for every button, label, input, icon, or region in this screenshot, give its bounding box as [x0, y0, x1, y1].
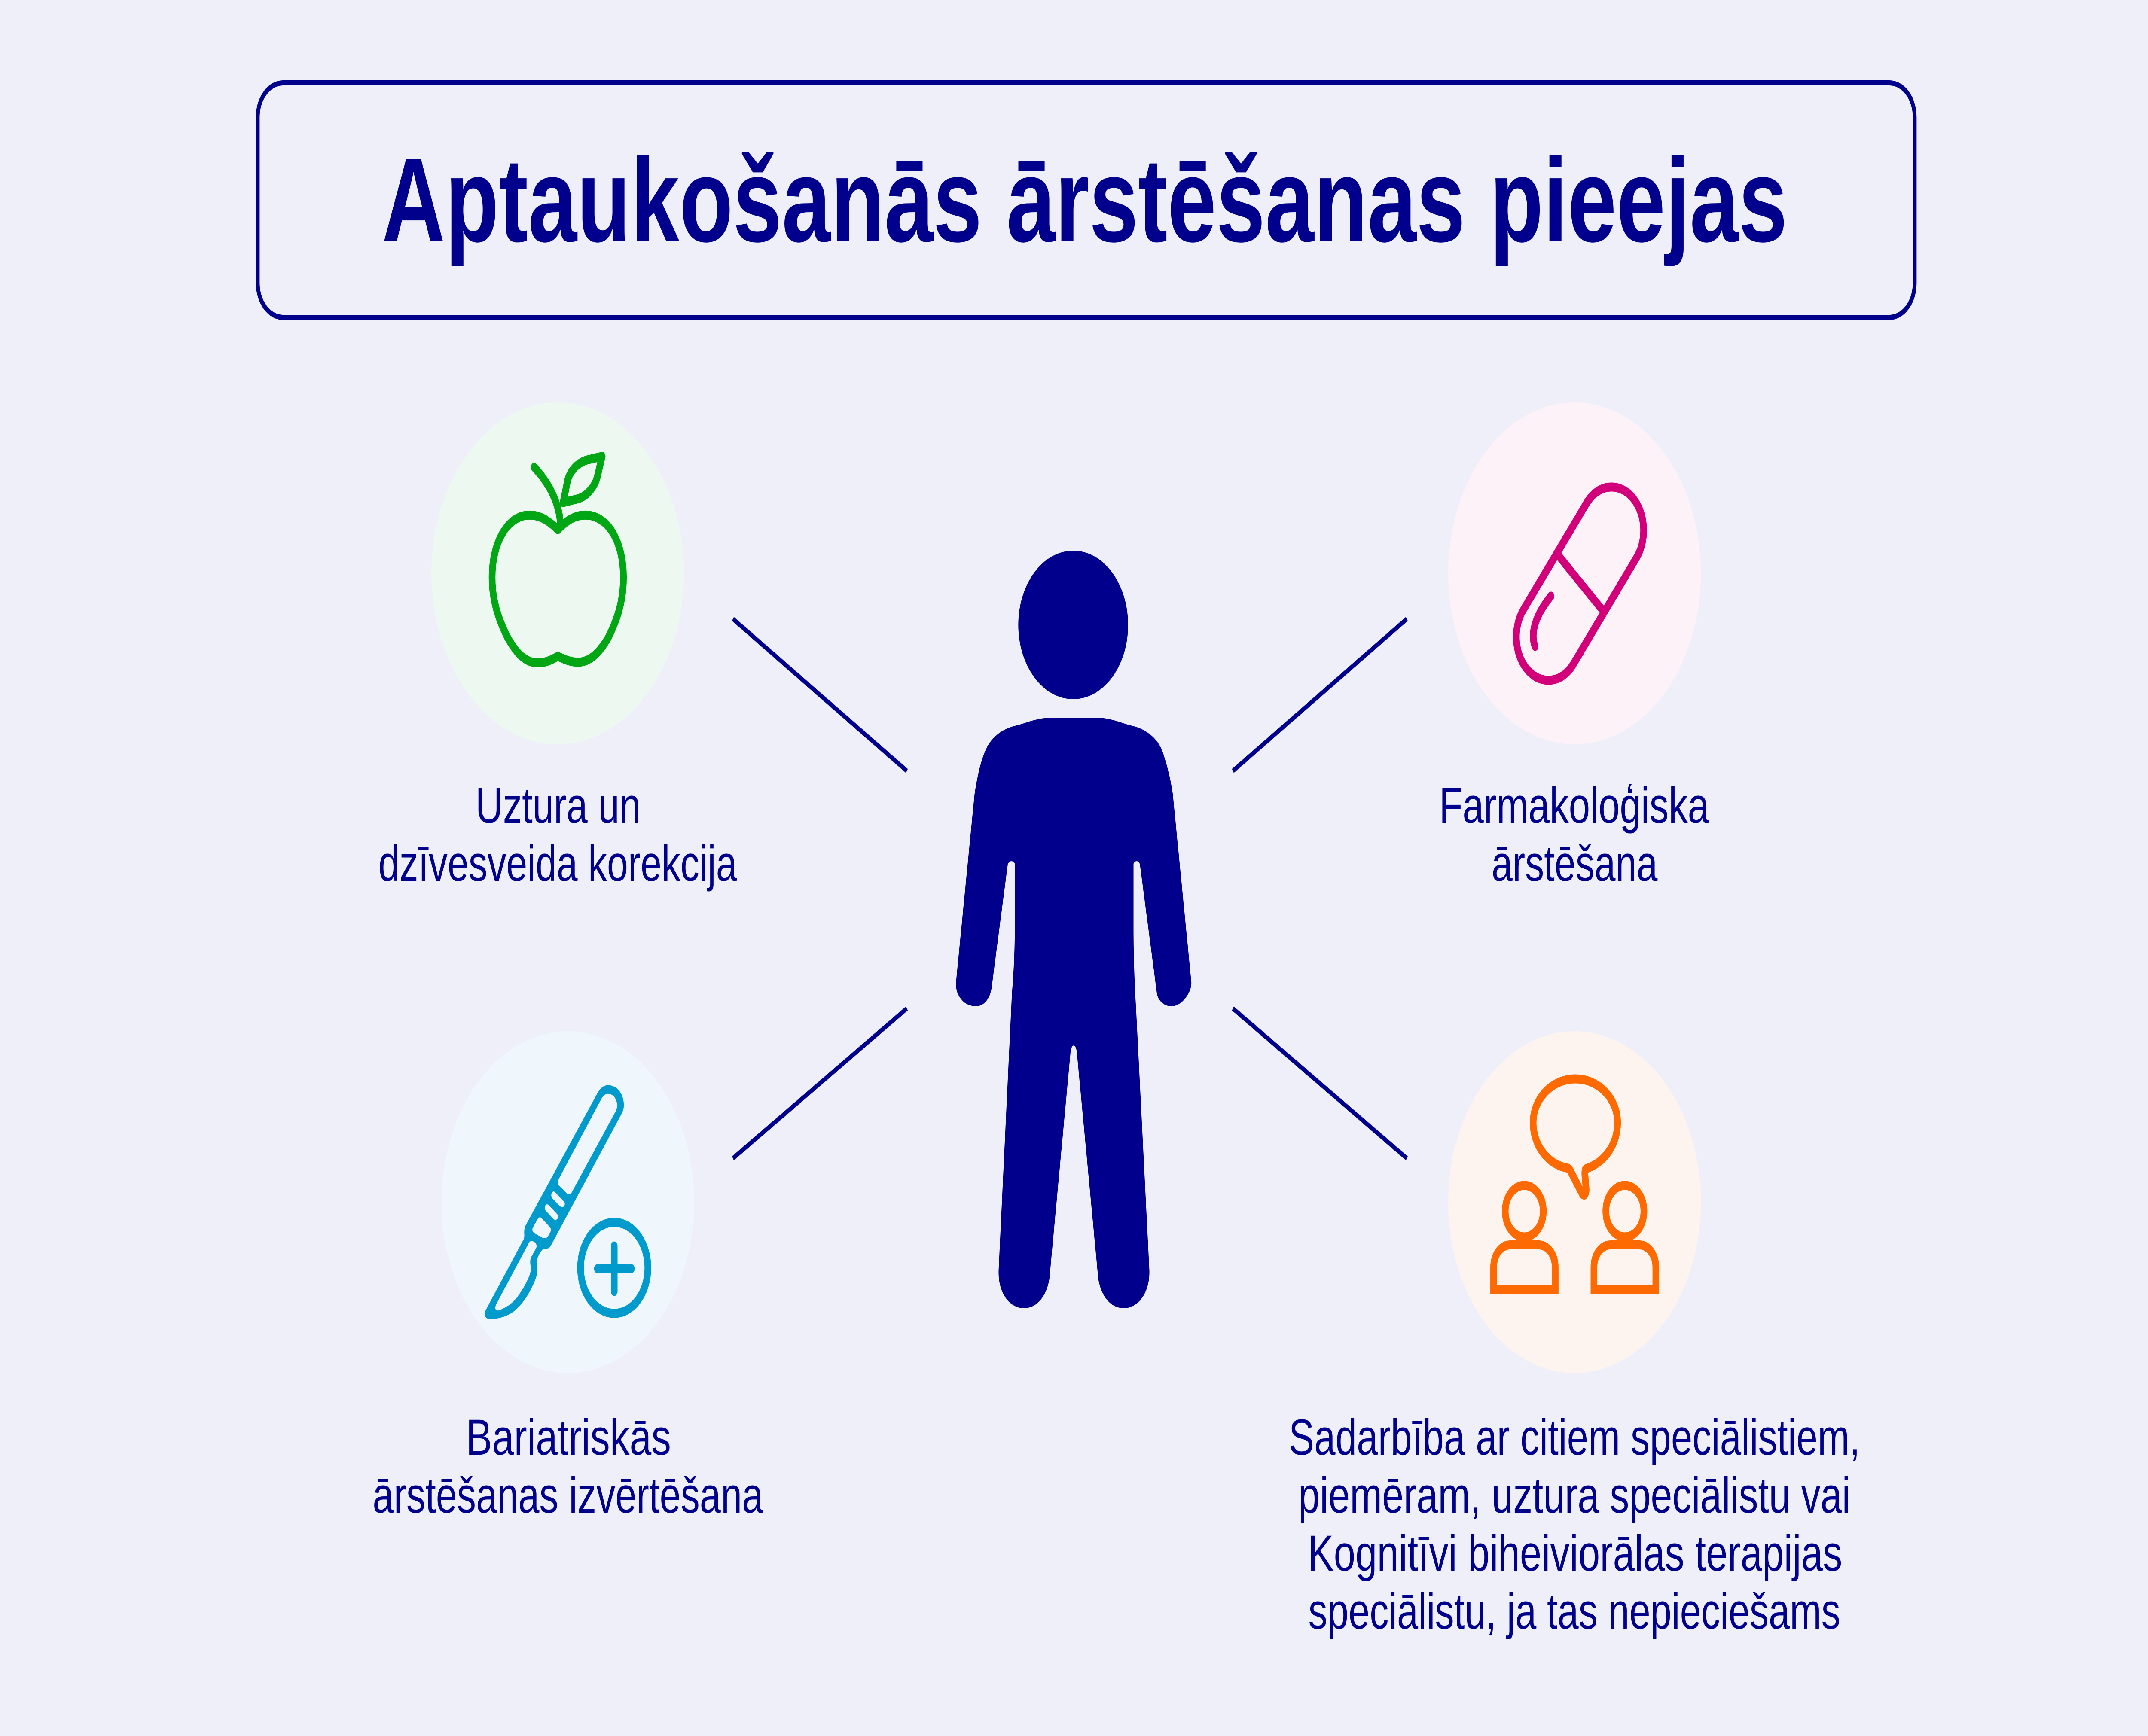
label: bariatric: ārstēšanas izvērtēšana [372, 1467, 763, 1523]
label: nutrition [378, 777, 737, 892]
label: bariatric: Bariatriskās [466, 1409, 671, 1465]
icon: two people talking [1448, 1031, 1701, 1373]
label: cooperation: piemēram, uztura speciālistu vai [1298, 1467, 1851, 1523]
label: pharmacological: ārstēšana [1492, 835, 1658, 892]
icon: scalpel with plus [442, 1031, 694, 1373]
label: pharmacological: Farmakoloģiska [1439, 777, 1709, 834]
icon: capsule [1448, 402, 1701, 744]
title banner: Aptaukošanās ārstēšanas pieejas [382, 134, 1788, 267]
central person figure [956, 551, 1191, 1308]
label: cooperation: Kognitīvi biheiviorālas terapijas [1308, 1525, 1842, 1581]
label: cooperation: Sadarbība ar citiem speciālistiem, [1289, 1409, 1860, 1465]
icon: apple [431, 402, 684, 744]
label: cooperation: speciālistu, ja tas nepieciešams [1309, 1583, 1840, 1639]
label: pharmacological [1439, 777, 1709, 892]
title banner [258, 83, 1915, 317]
label: cooperation [1289, 1409, 1860, 1639]
label: bariatric [372, 1409, 763, 1523]
connector lines [733, 619, 1407, 1158]
label: nutrition: dzīvesveida korekcija [378, 835, 737, 892]
panel: bariatric assessment [372, 1031, 763, 1523]
panel: cooperation with specialists [1289, 1031, 1860, 1639]
panel: pharmacological treatment [1439, 402, 1709, 892]
label: nutrition: Uztura un [476, 777, 641, 834]
panel: nutrition and lifestyle [378, 402, 737, 892]
